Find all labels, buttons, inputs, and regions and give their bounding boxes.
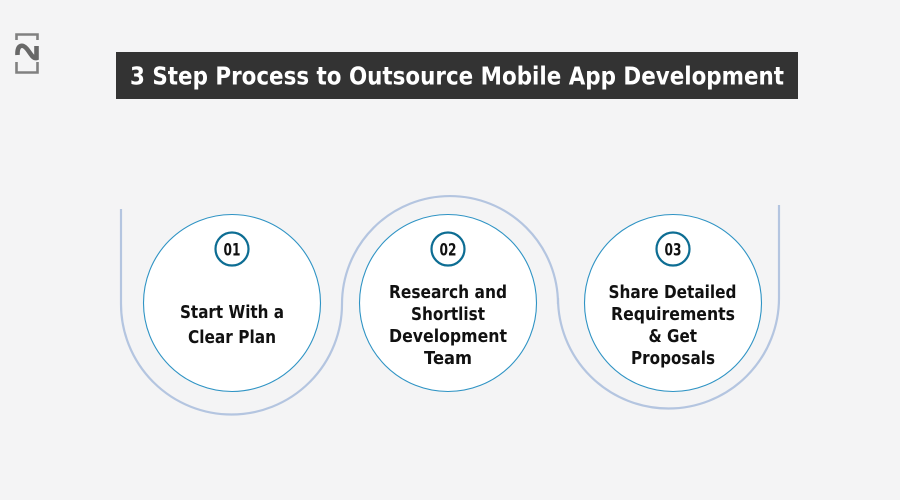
connector line [121, 196, 779, 414]
badge 02: 02 [440, 240, 456, 260]
step 1 [144, 214, 320, 392]
step 1 label: Clear Plan [188, 327, 276, 348]
badge 02 [432, 232, 464, 266]
step 3 label [608, 282, 736, 369]
step 3 label: Requirements [611, 304, 735, 325]
step 1 label [180, 302, 284, 348]
step 2 [360, 214, 536, 392]
step 3 label: & Get [648, 326, 697, 347]
title banner [116, 52, 798, 99]
step 2 label: Team [424, 348, 472, 369]
step 2 label: Shortlist [411, 304, 485, 325]
badge 01: 01 [224, 240, 240, 260]
logo icon [16, 34, 38, 72]
step 3 label: Proposals [631, 348, 715, 369]
step 3 label: Share Detailed [608, 282, 736, 303]
step 2 label [389, 282, 507, 369]
step 3 [584, 214, 762, 392]
title banner: 3 Step Process to Outsource Mobile App Development [130, 62, 784, 90]
step 2 label: Research and [389, 282, 507, 303]
step 1 label: Start With a [180, 302, 284, 323]
badge 03 [656, 232, 690, 266]
badge 01 [216, 232, 248, 266]
step 2 label: Development [389, 326, 507, 347]
badge 03: 03 [664, 240, 682, 260]
